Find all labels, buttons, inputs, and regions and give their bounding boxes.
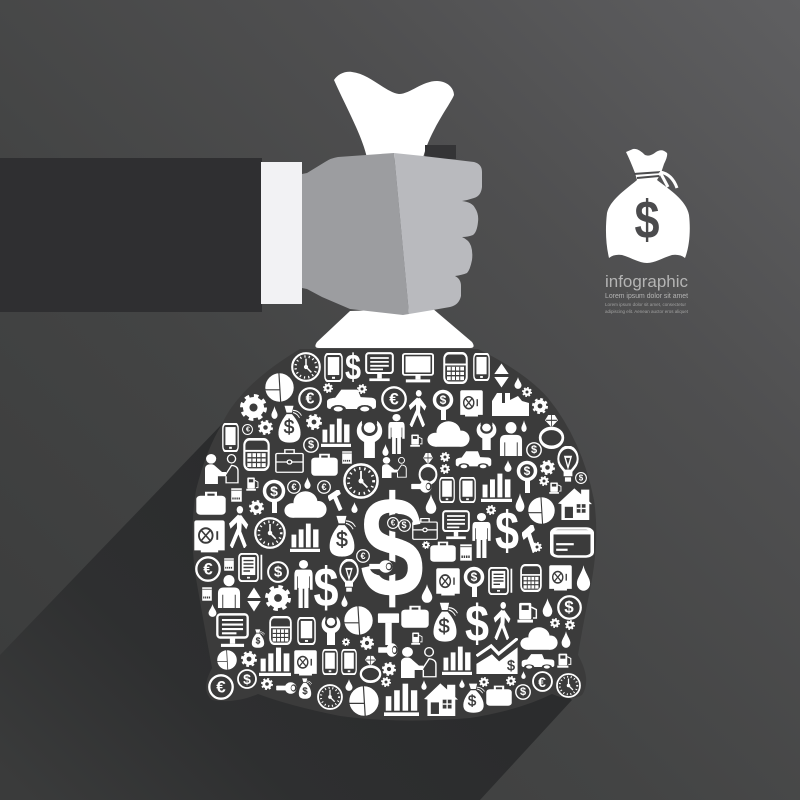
icon: car	[522, 654, 554, 670]
icon: drop	[521, 420, 527, 432]
icon: gear	[383, 663, 395, 675]
icon: monitor	[217, 614, 248, 647]
icon: magnifier	[434, 392, 452, 420]
icon: gear	[242, 396, 265, 419]
icon: hammer	[378, 613, 399, 645]
icon: magnifier: $	[440, 393, 447, 407]
icon: gear	[540, 477, 548, 485]
caption title: infographic	[605, 272, 688, 291]
icon: money bag: $	[438, 616, 450, 638]
icon: wrench	[411, 480, 432, 493]
icon: tablet	[489, 568, 512, 594]
icon: money bag: $	[302, 686, 308, 696]
icon: dollar coin	[576, 473, 586, 483]
icon: handshake	[401, 647, 436, 678]
caption body	[605, 302, 689, 315]
icon: euro coin	[209, 675, 233, 699]
icon: gear	[441, 453, 449, 461]
icon: money bag	[252, 629, 265, 648]
icon: money bag: $	[256, 636, 261, 646]
icon: dollar coin: $	[531, 444, 537, 456]
icon: standing man	[472, 513, 491, 558]
icon: gear	[487, 506, 495, 514]
icon: dollar coin: $	[579, 474, 584, 482]
icon: handshake	[205, 454, 238, 484]
bag top knot	[334, 72, 454, 158]
icon: wrench	[378, 643, 398, 657]
icon: gear	[423, 542, 429, 548]
icon: monitor blank	[403, 354, 433, 382]
icon: drop	[341, 595, 348, 607]
icon: house	[424, 683, 458, 716]
icon: euro coin	[318, 481, 330, 493]
icon: drop	[459, 679, 465, 688]
icon: drop	[521, 671, 526, 679]
long shadow of the bag	[0, 424, 572, 800]
icon: gear	[441, 465, 449, 473]
icon: magnifier	[264, 482, 284, 513]
icon: bulb	[558, 447, 578, 482]
thumb shadow block	[425, 145, 456, 159]
icon: briefcase	[401, 607, 429, 628]
icon: calculator	[270, 617, 291, 644]
icon: dollar coin: $	[243, 671, 251, 687]
icon: gear	[259, 421, 272, 434]
icon: money bag	[299, 678, 312, 699]
icon: monitor	[366, 353, 393, 381]
icon: pie	[349, 686, 379, 716]
caption subtitle: Lorem ipsum dolor sit amet	[605, 291, 689, 300]
arm and fist holding the bag	[0, 72, 482, 348]
icon: bar chart	[481, 474, 512, 502]
icon: bar chart	[259, 648, 291, 676]
icon: euro coin	[299, 388, 321, 410]
icon: gear	[324, 384, 332, 392]
icon: briefcase	[276, 450, 303, 472]
icon: gauge	[318, 685, 342, 709]
icon: dollar coin: $	[564, 598, 574, 616]
big dollar lower counter	[370, 560, 400, 576]
icon: fuel	[410, 435, 422, 447]
icon: dollar: $	[345, 346, 361, 388]
icon: standing man	[294, 560, 313, 608]
icon: magnifier: $	[524, 464, 531, 478]
icon: ring	[540, 415, 563, 447]
icon: briefcase	[486, 686, 512, 706]
icon: factory	[492, 393, 529, 416]
icon: euro coin: €	[246, 426, 250, 434]
icon: gauge	[255, 518, 285, 548]
icon: dollar coin	[558, 596, 581, 619]
icon: person	[218, 575, 240, 608]
icon: briefcase	[311, 455, 338, 476]
icon: drop	[514, 377, 522, 389]
icon: dollar coin	[399, 520, 410, 531]
icon: gear	[566, 621, 574, 629]
icon: safe	[194, 520, 225, 552]
icon: magnifier: $	[471, 570, 478, 584]
icon: person	[500, 422, 522, 456]
icon: euro coin: €	[216, 678, 226, 696]
caption body: Lorem ipsum dolor sit amet, consectetur	[605, 302, 686, 308]
icon: magnifier	[518, 462, 536, 493]
icon: wrench	[477, 422, 496, 450]
icon: calculator	[444, 353, 467, 383]
icon: euro coin	[243, 425, 252, 434]
icon: monitor	[443, 511, 469, 539]
icon: walking man	[230, 506, 247, 547]
icon: trend chart	[476, 638, 518, 674]
icon: drop	[422, 584, 432, 603]
icon: magnifier	[466, 568, 482, 597]
icon: euro coin: €	[321, 482, 327, 492]
icon: pie	[344, 606, 373, 635]
icon: bar chart	[384, 684, 419, 716]
icon: phone	[223, 424, 238, 451]
icon: money bag	[434, 603, 457, 642]
icon: gear	[307, 415, 321, 429]
icon: dollar coin	[516, 685, 530, 699]
icon: bar chart	[442, 647, 472, 675]
icon: euro coin: €	[291, 482, 297, 492]
icon: fuel	[411, 633, 422, 645]
small bag dollar: $	[634, 190, 660, 250]
icon: trend chart: $	[507, 657, 515, 673]
icon: euro coin	[388, 518, 398, 528]
icon: drop	[209, 604, 216, 617]
icon: clock	[344, 464, 378, 498]
icon: drop	[562, 631, 570, 648]
icon: car	[327, 390, 376, 413]
icon: wrench	[357, 420, 382, 458]
bag silhouette	[192, 349, 596, 721]
icon: magnifier: $	[270, 483, 278, 499]
icon: dollar: $	[314, 556, 338, 618]
icon: money bag	[330, 516, 355, 557]
icon: gear	[267, 587, 289, 609]
caption body: adipiscing elit. Aenean auctor eros aliquet	[605, 309, 689, 315]
icon: drop	[382, 444, 389, 456]
icon: fuel	[549, 482, 561, 494]
icon: dollar coin: $	[308, 439, 314, 451]
icon: dollar: $	[495, 501, 519, 561]
icon: gear	[242, 652, 256, 666]
icon: dollar coin: $	[274, 564, 283, 580]
icon: handshake	[382, 457, 406, 478]
icon: phone	[298, 618, 315, 644]
icon: gauge	[557, 674, 580, 697]
shirt cuff	[261, 162, 302, 304]
icon: mini calculator	[460, 544, 472, 561]
icon: safe	[549, 565, 572, 590]
icon: ring	[420, 453, 436, 483]
small bag tie	[634, 172, 662, 178]
icon: euro coin: €	[391, 518, 396, 528]
icon: euro coin	[533, 672, 552, 691]
icon: drop	[516, 493, 524, 512]
bag gathered neck	[315, 308, 474, 348]
icon: briefcase	[430, 542, 456, 562]
icon: briefcase	[196, 493, 226, 515]
icon: gear	[382, 678, 390, 686]
icon: bar chart	[321, 419, 351, 447]
icon: safe	[436, 568, 460, 595]
icon: gear	[343, 639, 349, 645]
small bag body	[606, 149, 690, 263]
icon: euro coin	[382, 387, 406, 411]
icon: phone	[323, 650, 337, 674]
icon: money bag	[278, 406, 302, 443]
icon: mini calculator	[342, 451, 352, 464]
icon: drop	[304, 477, 311, 489]
icon: euro coin: €	[360, 551, 366, 561]
icon: gear	[507, 677, 515, 685]
icon: fuel	[517, 603, 536, 623]
icon: dollar coin: $	[520, 686, 526, 698]
icon: wrench	[276, 682, 297, 694]
icon: gear	[551, 619, 559, 627]
icon: fuel	[246, 478, 258, 491]
icon: drop	[271, 406, 278, 419]
icon: gear	[358, 385, 366, 393]
icon: tablet	[239, 554, 262, 581]
icon: walking man	[494, 602, 510, 639]
icon: euro coin: €	[389, 390, 399, 408]
icon: safe	[460, 390, 483, 416]
icon: phone	[460, 478, 475, 502]
icon: money bag: $	[468, 692, 477, 710]
icon: bulb	[340, 560, 358, 592]
icon: gear	[533, 399, 547, 413]
icon: dollar: $	[465, 595, 489, 653]
icon: euro coin: €	[203, 560, 213, 578]
icon: arrows	[494, 364, 509, 388]
icon: pie	[528, 497, 555, 524]
icon: euro coin: €	[538, 674, 546, 690]
icon: phone	[342, 650, 356, 674]
icon: money bag: $	[284, 418, 295, 438]
icon: euro coin: €	[306, 390, 315, 408]
icon: drop	[426, 494, 436, 514]
icon: car	[456, 451, 491, 470]
icon: arrows	[247, 588, 261, 612]
icon: dollar coin	[268, 562, 288, 582]
icon: calculator	[244, 439, 269, 470]
icon: money bag: $	[336, 528, 348, 552]
icon: drop	[504, 460, 512, 472]
icon: drop	[543, 598, 552, 617]
small bag ribbon	[660, 172, 677, 188]
icon: drop	[345, 679, 353, 691]
icon: cloud	[284, 491, 327, 518]
icon: dollar coin	[304, 438, 318, 452]
icon: phone	[440, 478, 454, 502]
icon: wrench	[369, 560, 393, 573]
icon: gear	[480, 678, 488, 686]
icon: hammer	[327, 489, 346, 514]
icon: gear	[523, 388, 531, 396]
icon: cloud	[520, 627, 558, 650]
small money bag icon	[606, 149, 690, 263]
icon: cloud	[427, 421, 470, 447]
icon: pie	[217, 650, 237, 670]
infographic caption	[605, 272, 689, 315]
icon: bar chart	[290, 524, 320, 552]
icon: phone	[474, 354, 489, 380]
icon: gear	[250, 501, 263, 514]
icon: drop	[577, 565, 590, 591]
icon: drop	[351, 502, 358, 513]
big dollar upper counter	[383, 514, 413, 532]
icon: card	[552, 529, 592, 556]
icon: ring	[361, 656, 380, 682]
icon: hammer	[521, 523, 540, 557]
icon: euro coin	[288, 481, 300, 493]
icon: euro coin	[357, 550, 369, 562]
money bag made of icons	[192, 346, 596, 721]
sleeve	[0, 158, 262, 312]
icon: gear	[533, 543, 541, 551]
icon: pie	[265, 373, 294, 402]
icon: euro coin	[196, 557, 220, 581]
icon: drop	[421, 680, 427, 690]
icon: mini calculator	[202, 587, 212, 601]
icon: safe	[294, 650, 317, 675]
icon: house	[558, 488, 592, 520]
icon: wrench	[322, 616, 340, 645]
icon: gear	[361, 637, 373, 649]
icon: money bag	[463, 684, 485, 713]
icon: dollar coin	[238, 670, 256, 688]
icon: briefcase	[413, 519, 437, 539]
back of hand	[302, 153, 409, 315]
icon: clock	[292, 353, 320, 381]
icon: phone	[325, 354, 342, 381]
icon: dollar coin	[527, 443, 541, 457]
icon: standing man	[388, 414, 405, 454]
icon: mini calculator	[231, 488, 242, 502]
icon: walking man	[410, 390, 425, 426]
icon: mini calculator	[224, 558, 234, 571]
icon: big dollar sign: $	[360, 466, 424, 628]
fingers	[394, 153, 482, 314]
icon: calculator	[521, 565, 541, 591]
icon: gear	[262, 679, 272, 689]
icon: fuel	[557, 654, 571, 668]
icon: dollar coin: $	[401, 520, 407, 530]
icon: gear	[541, 461, 554, 474]
